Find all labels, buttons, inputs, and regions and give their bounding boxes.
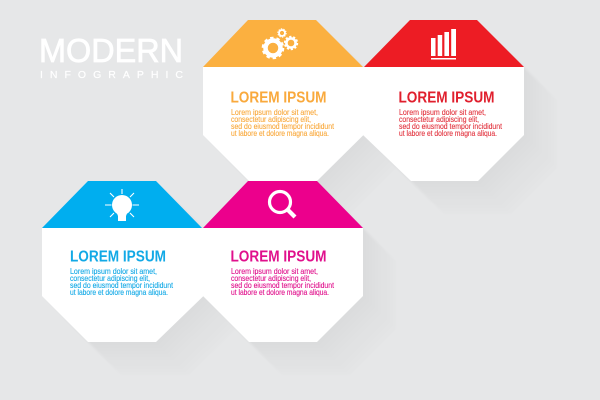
title xyxy=(39,33,183,81)
panel: orange xyxy=(203,20,364,181)
body text xyxy=(399,108,503,138)
icon: light bulb xyxy=(105,189,139,221)
body text: consectetur adipiscing elit, xyxy=(231,274,311,283)
body text: sed do eiusmod tempor incididunt xyxy=(399,122,503,131)
icon: magnifier xyxy=(270,192,295,217)
body text: Lorem ipsum dolor sit amet, xyxy=(399,108,486,117)
body text: Lorem ipsum dolor sit amet, xyxy=(231,267,318,276)
panel body xyxy=(363,67,524,181)
body text: ut labore et dolore magna aliqua. xyxy=(231,288,329,297)
subtitle: INFOGRAPHIC: INFOGRAPHIC xyxy=(40,69,183,81)
body text: consectetur adipiscing elit, xyxy=(70,274,150,283)
panel header xyxy=(42,181,202,228)
body text: sed do eiusmod tempor incididunt xyxy=(70,281,174,290)
body text: consectetur adipiscing elit, xyxy=(399,115,479,124)
body text xyxy=(231,108,335,138)
panel header xyxy=(203,181,363,228)
body text: Lorem ipsum dolor sit amet, xyxy=(70,267,157,276)
panel body xyxy=(203,228,363,342)
body text: sed do eiusmod tempor incididunt xyxy=(231,122,335,131)
panel: pink xyxy=(203,181,363,342)
long diagonal shadows xyxy=(45,23,557,375)
panel body xyxy=(42,228,204,342)
icon: gears xyxy=(263,29,297,58)
panel header xyxy=(364,20,524,67)
panel header xyxy=(203,20,363,67)
panel: blue xyxy=(42,181,204,342)
heading: LOREM IPSUM xyxy=(70,248,166,266)
body text: ut labore et dolore magna aliqua. xyxy=(399,129,497,138)
body text xyxy=(231,267,335,297)
body text: Lorem ipsum dolor sit amet, xyxy=(231,108,318,117)
body text: ut labore et dolore magna aliqua. xyxy=(70,288,168,297)
heading: LOREM IPSUM xyxy=(230,90,326,106)
heading: LOREM IPSUM xyxy=(398,90,494,106)
body text xyxy=(70,267,174,297)
body text: consectetur adipiscing elit, xyxy=(231,115,311,124)
panel: red xyxy=(363,20,524,181)
body text: sed do eiusmod tempor incididunt xyxy=(231,281,335,290)
panel body xyxy=(203,67,364,181)
title: MODERN: MODERN xyxy=(39,33,183,70)
heading: LOREM IPSUM xyxy=(230,248,326,266)
body text: ut labore et dolore magna aliqua. xyxy=(231,129,329,138)
icon: bar chart xyxy=(431,29,456,60)
